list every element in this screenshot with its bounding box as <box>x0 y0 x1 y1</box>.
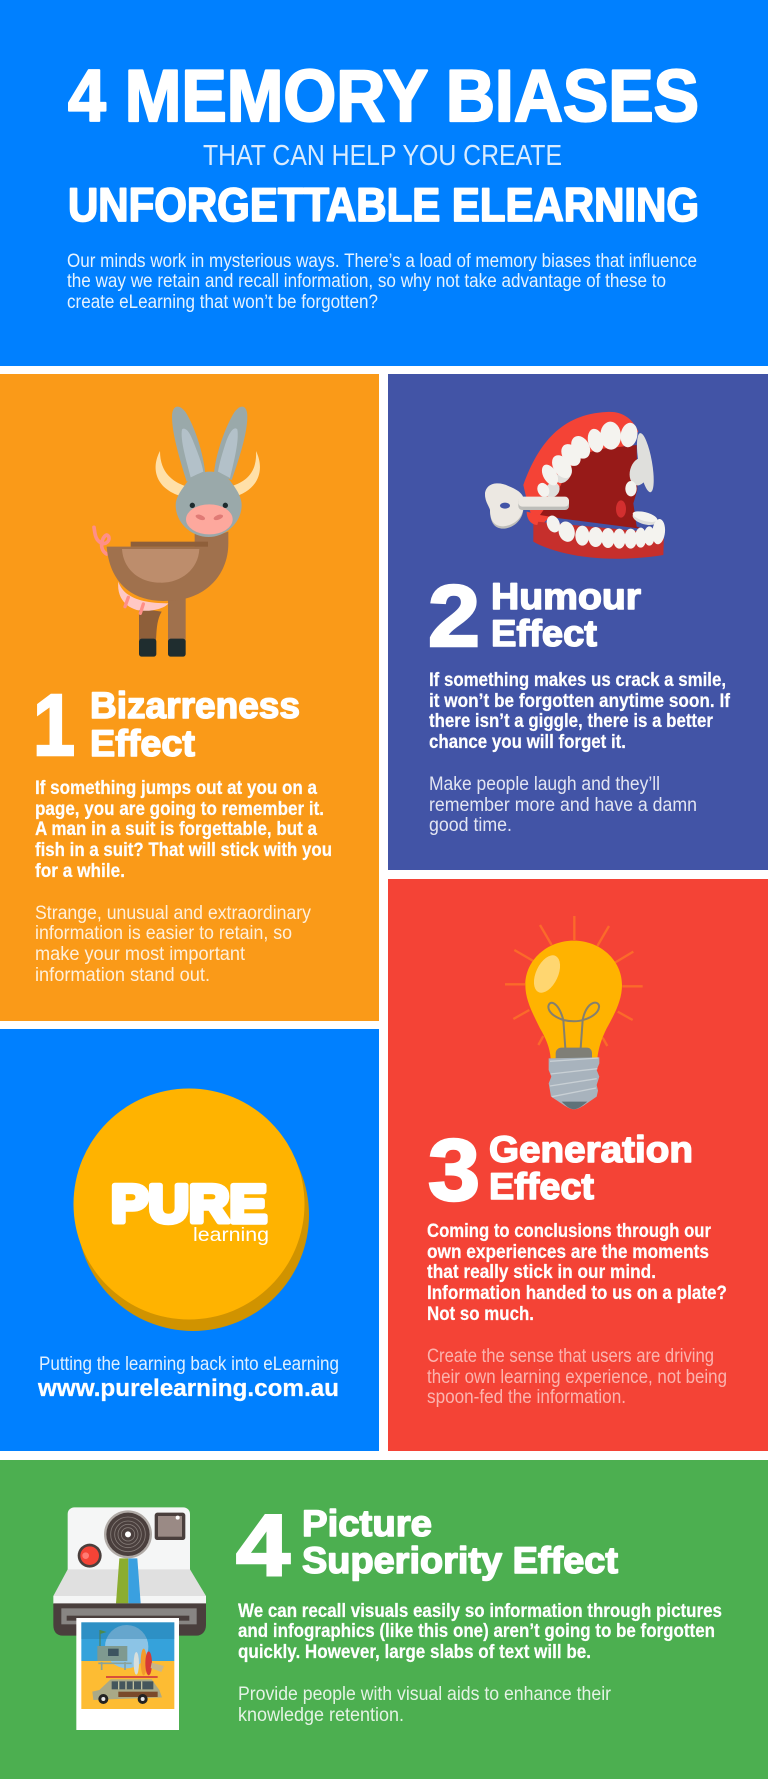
panel: header <box>0 0 768 366</box>
heading: Generation <box>489 1129 693 1170</box>
heading: Effect <box>489 1166 594 1207</box>
bold text: Coming to conclusions through our <box>427 1221 712 1242</box>
heading: Superiority Effect <box>302 1540 618 1581</box>
bold text: there isn’t a giggle, there is a better <box>429 711 714 732</box>
light text: good time. <box>429 815 512 836</box>
bold text <box>35 778 332 882</box>
website url: www.purelearning.com.au <box>37 1375 339 1402</box>
light text <box>35 903 311 986</box>
light text: Provide people with visual aids to enhance their <box>238 1684 612 1705</box>
light text: Create the sense that users are driving <box>427 1346 714 1367</box>
number 1: 1 <box>33 677 75 774</box>
intro text <box>67 251 697 313</box>
heading <box>302 1503 618 1581</box>
bold text: it won’t be forgotten anytime soon. If <box>429 691 731 712</box>
light text <box>429 774 697 836</box>
light text: Strange, unusual and extraordinary <box>35 903 311 924</box>
bold text: and infographics (like this one) aren’t going to be forgotten <box>238 1621 715 1642</box>
bold text: that really stick in our mind. <box>427 1262 656 1283</box>
light text: make your most important <box>35 944 246 965</box>
title: 4 MEMORY BIASES <box>68 56 699 137</box>
icon: light bulb <box>505 916 643 1109</box>
bold text: own experiences are the moments <box>427 1242 709 1263</box>
heading <box>491 576 641 654</box>
logo: pure learning badge: PURE <box>111 1175 267 1234</box>
number 2: 2 <box>428 568 480 665</box>
icon: donkey cow <box>94 407 260 657</box>
tagline: Putting the learning back into eLearning <box>39 1354 339 1375</box>
light text <box>427 1346 727 1408</box>
light text: information is easier to retain, so <box>35 923 292 944</box>
light text: their own learning experience, not being <box>427 1367 727 1388</box>
bold text: quickly. However, large slabs of text will be. <box>238 1642 591 1663</box>
number 4: 4 <box>236 1497 290 1594</box>
bold text: page, you are going to remember it. <box>35 799 324 820</box>
panel: picture superiority effect <box>0 1460 768 1779</box>
heading: Effect <box>491 613 597 654</box>
heading <box>489 1129 693 1207</box>
heading <box>90 685 300 764</box>
panel: bizarreness effect <box>0 374 379 1021</box>
title line 2: UNFORGETTABLE ELEARNING <box>68 178 699 231</box>
bold text: If something makes us crack a smile, <box>429 670 726 691</box>
subtitle: THAT CAN HELP YOU CREATE <box>203 140 562 172</box>
bold text: for a while. <box>35 861 125 882</box>
icon: wind-up teeth <box>485 412 666 559</box>
heading: Picture <box>302 1503 432 1544</box>
heading: Bizarreness <box>90 685 300 726</box>
light text <box>238 1684 612 1726</box>
intro text: create eLearning that won’t be forgotten? <box>67 292 378 313</box>
logo: pure learning badge <box>74 1088 309 1331</box>
bold text: Information handed to us on a plate? <box>427 1283 727 1304</box>
panel: humour effect <box>388 374 768 870</box>
light text: Make people laugh and they’ll <box>429 774 660 795</box>
icon: instant camera <box>53 1507 206 1730</box>
logo: pure learning badge: learning <box>193 1225 269 1246</box>
light text: remember more and have a damn <box>429 795 697 816</box>
bold text: fish in a suit? That will stick with you <box>35 840 332 861</box>
bold text: Not so much. <box>427 1304 534 1325</box>
light text: information stand out. <box>35 965 210 986</box>
heading: Humour <box>491 576 641 617</box>
heading: Effect <box>90 723 195 764</box>
panel: pure learning <box>0 1029 379 1451</box>
intro text: the way we retain and recall information, so why not take advantage of these to <box>67 271 666 292</box>
bold text: If something jumps out at you on a <box>35 778 317 799</box>
light text: knowledge retention. <box>238 1705 404 1726</box>
bold text <box>238 1601 722 1663</box>
bold text: chance you will forget it. <box>429 732 626 753</box>
bold text <box>427 1221 727 1325</box>
number 3: 3 <box>428 1122 480 1219</box>
bold text <box>429 670 731 753</box>
bold text: We can recall visuals easily so information through pictures <box>238 1601 722 1622</box>
panel: generation effect <box>388 879 768 1451</box>
light text: spoon-fed the information. <box>427 1387 626 1408</box>
bold text: A man in a suit is forgettable, but a <box>35 819 317 840</box>
intro text: Our minds work in mysterious ways. There’s a load of memory biases that influence <box>67 251 697 272</box>
